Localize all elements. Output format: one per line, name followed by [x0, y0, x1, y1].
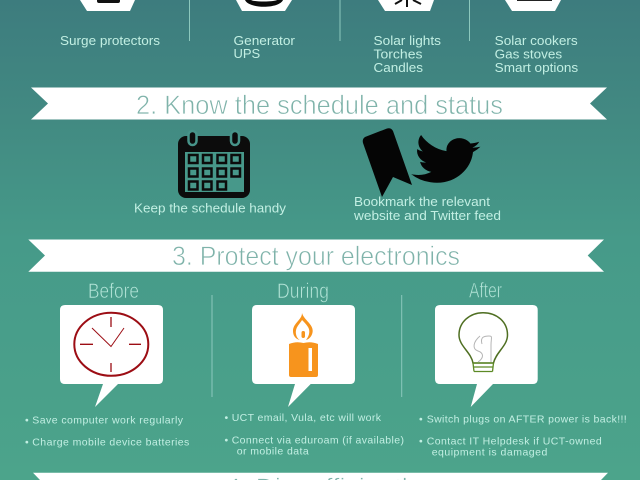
list: before tips: • [25, 437, 29, 449]
list: after tips: • [419, 413, 423, 425]
speech bubble: before [60, 305, 163, 407]
text: cooking options: Gas stoves [495, 46, 563, 62]
panel: during [224, 280, 404, 457]
list: during tips [224, 412, 404, 457]
list: during tips: • [224, 434, 228, 446]
heading ribbon: section 2: 2. Know the schedule and status [136, 90, 503, 120]
list: after tips: Switch plugs on AFTER power is back!!! [427, 413, 627, 425]
text: generator options [234, 33, 296, 61]
panel: after [419, 280, 627, 459]
list: before tips: • [25, 414, 29, 426]
heading ribbon: section 4 [33, 472, 608, 480]
list: before tips: Save computer work regularly [32, 414, 184, 426]
icon: clock [74, 313, 148, 376]
icon: calendar [178, 131, 250, 198]
icon: surge protector hexagon [80, 0, 135, 11]
text: cooking options: Solar cookers [495, 33, 578, 48]
heading: after: After [469, 280, 502, 302]
heading: before: Before [88, 280, 139, 303]
text: generator options: Generator [234, 33, 296, 48]
panel: backup power options [60, 0, 579, 75]
icon: twitter bird [410, 132, 481, 188]
list: after tips [419, 413, 627, 459]
text: lighting options: Solar lights [374, 33, 442, 48]
panel: before [25, 280, 189, 449]
speech bubble: after [435, 305, 538, 407]
text: bookmark advice [353, 194, 501, 223]
text: bookmark advice: Bookmark the relevant [354, 194, 490, 209]
icon: bookmark [363, 128, 412, 197]
list: after tips: • [419, 435, 423, 447]
icon: light bulb [459, 313, 508, 372]
heading: during: During [277, 280, 329, 303]
text: bookmark advice: website and Twitter feed [353, 208, 501, 223]
speech bubble: during [252, 305, 355, 407]
list: during tips: or mobile data [237, 445, 309, 457]
text: keep the schedule handy: Keep the schedule handy [134, 201, 287, 216]
list: during tips: Connect via eduroam (if available) [232, 434, 404, 446]
heading ribbon: section 2 [31, 88, 607, 120]
text: cooking options [495, 33, 579, 75]
list: during tips: • [224, 412, 228, 424]
list: before tips: Charge mobile device batteries [32, 437, 189, 449]
list: after tips: Contact IT Helpdesk if UCT-owned [427, 435, 602, 447]
list: before tips [25, 414, 189, 449]
text: lighting options: Candles [374, 60, 424, 75]
text: cooking options: Smart options [495, 60, 579, 75]
heading ribbon: section 3: 3. Protect your electronics [172, 241, 460, 271]
text: generator options: UPS [234, 46, 261, 61]
text: surge protectors: Surge protectors [60, 33, 161, 48]
text: lighting options [374, 33, 442, 75]
heading ribbon: section 3 [28, 240, 604, 272]
list: during tips: UCT email, Vula, etc will work [232, 412, 382, 424]
icon: cooker hexagon [505, 0, 561, 11]
icon: generator hexagon [236, 0, 292, 11]
list: after tips: equipment is damaged [432, 447, 547, 459]
icon: solar light hexagon [378, 0, 434, 11]
icon: candle [289, 313, 318, 377]
text: lighting options: Torches [374, 46, 423, 62]
panel: know the schedule [134, 128, 501, 223]
